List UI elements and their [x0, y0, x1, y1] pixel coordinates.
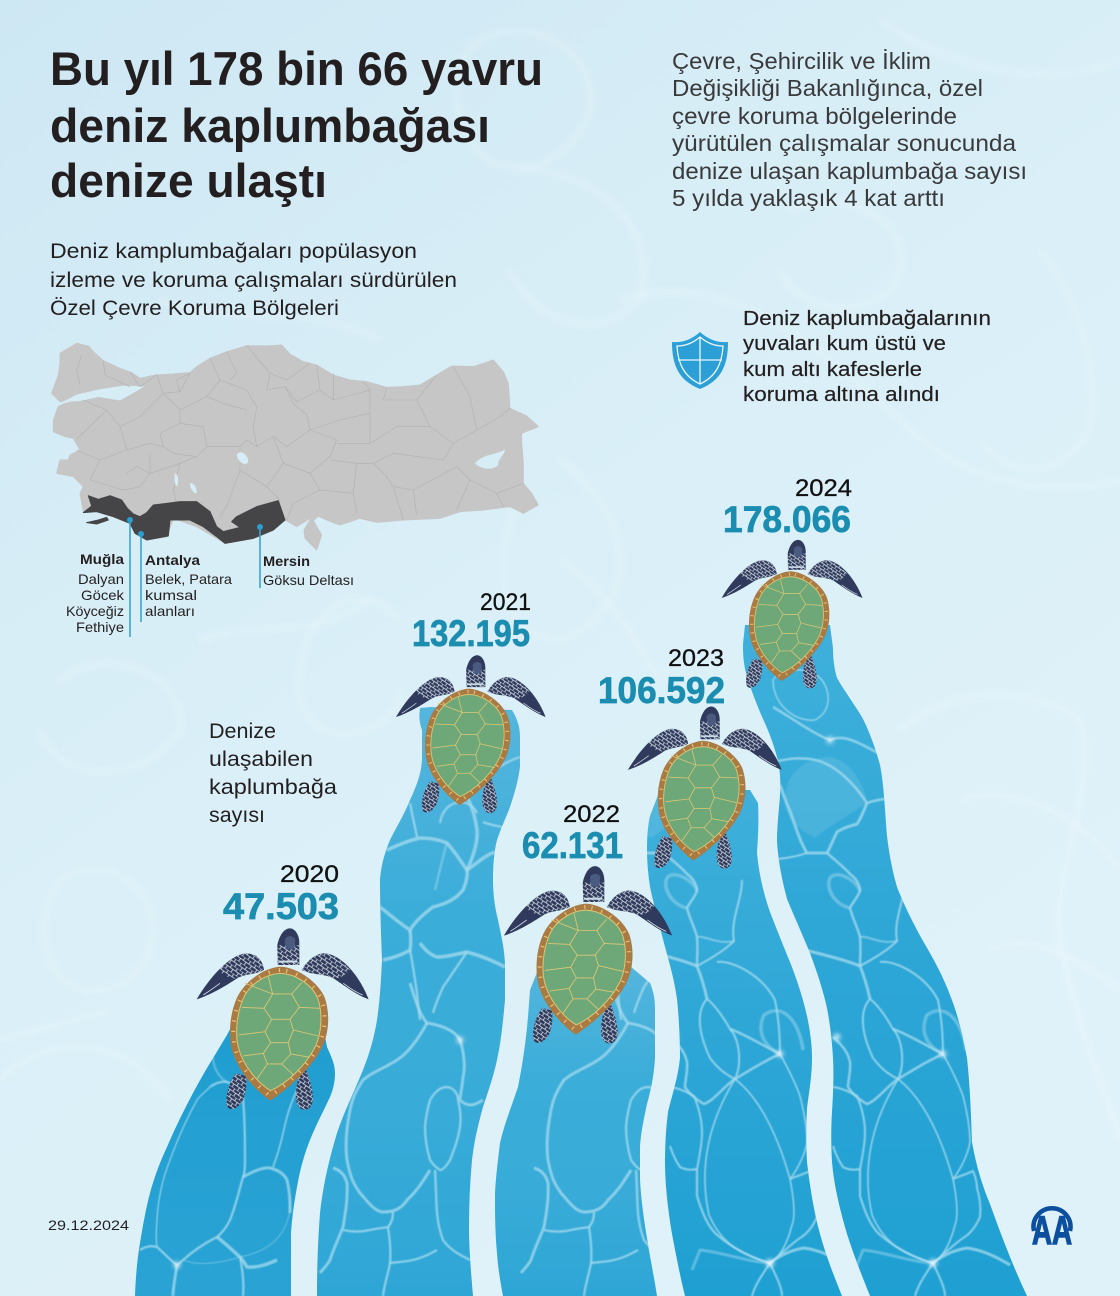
intro paragraph: denize ulaşan kaplumbağa sayısı — [672, 158, 1027, 184]
chart label: sayısı — [209, 804, 265, 827]
value 2024: 2024 — [795, 475, 852, 502]
value 2020 — [223, 861, 339, 927]
date: 29.12.2024 — [48, 1217, 129, 1233]
chart label: ulaşabilen — [209, 748, 313, 771]
turtle 2020 — [197, 928, 369, 1110]
map leaders and labels: Fethiye — [76, 619, 124, 635]
map leaders and labels: Köyceğiz — [66, 603, 124, 619]
callout: nest protection — [743, 308, 991, 406]
intro paragraph: çevre koruma bölgelerinde — [672, 103, 957, 129]
title: Bu yıl 178 bin 66 yavru — [50, 42, 543, 95]
icon: shield — [672, 332, 728, 389]
map leaders and labels: kumsal — [145, 587, 197, 603]
turtle 2023 — [628, 706, 782, 869]
turtle 2021 — [396, 655, 546, 813]
logo: AA — [1032, 1208, 1072, 1253]
map heading: izleme ve koruma çalışmaları sürdürülen — [50, 269, 457, 292]
value 2024 — [723, 475, 852, 540]
value 2022 — [522, 801, 623, 866]
value 2022: 2022 — [563, 801, 620, 828]
value 2020: 47.503 — [223, 886, 339, 927]
value 2021 — [412, 589, 531, 654]
title: deniz kaplumbağası — [50, 99, 490, 152]
value 2021: 132.195 — [412, 613, 530, 654]
stream: 2024 — [740, 620, 1030, 1296]
title: denize ulaştı — [50, 154, 327, 207]
value 2021: 2021 — [480, 589, 531, 616]
chart label — [209, 720, 337, 827]
map heading: Özel Çevre Koruma Bölgeleri — [50, 297, 339, 320]
map leaders and labels: Antalya — [145, 552, 200, 568]
value 2020: 2020 — [280, 861, 339, 888]
intro paragraph: yürütülen çalışmalar sonucunda — [672, 130, 1016, 156]
stream: 2023 — [647, 790, 842, 1296]
callout: nest protection: Deniz kaplumbağalarının — [743, 308, 991, 330]
map leaders and labels: Belek, Patara — [145, 571, 232, 587]
chart label: Denize — [209, 720, 276, 743]
value 2023: 106.592 — [598, 670, 725, 711]
stream: 2021 — [310, 700, 520, 1296]
value 2022: 62.131 — [522, 825, 623, 866]
value 2023 — [598, 645, 725, 711]
map leaders and labels: Dalyan — [78, 571, 124, 587]
title — [50, 42, 543, 207]
stream: 2022 — [495, 967, 657, 1296]
map leaders and labels: Mersin — [263, 553, 310, 569]
map leaders and labels — [66, 517, 354, 637]
turtle 2022 — [504, 866, 672, 1044]
map: Turkey provinces — [52, 343, 538, 550]
intro paragraph — [672, 48, 1027, 211]
map leaders and labels: alanları — [145, 603, 195, 619]
value 2023: 2023 — [668, 645, 724, 672]
map heading: Deniz kamplumbağaları popülasyon — [50, 240, 417, 263]
map heading — [50, 240, 457, 320]
map leaders and labels: Muğla — [80, 551, 124, 567]
map leaders and labels: Göksu Deltası — [263, 572, 354, 588]
callout: nest protection: yuvaları kum üstü ve — [743, 333, 946, 355]
chart label: kaplumbağa — [209, 776, 337, 799]
map leaders and labels: Göcek — [81, 587, 125, 603]
turtle 2024 — [722, 540, 863, 688]
intro paragraph: 5 yılda yaklaşık 4 kat arttı — [672, 185, 945, 211]
callout: nest protection: kum altı kafeslerle — [743, 359, 922, 381]
intro paragraph: Değişikliği Bakanlığınca, özel — [672, 75, 983, 101]
value 2024: 178.066 — [723, 499, 851, 540]
stream: 2020 — [135, 1028, 335, 1296]
logo: AA: AA — [1032, 1209, 1072, 1253]
callout: nest protection: koruma altına alındı — [743, 384, 940, 406]
intro paragraph: Çevre, Şehircilik ve İklim — [672, 48, 931, 74]
